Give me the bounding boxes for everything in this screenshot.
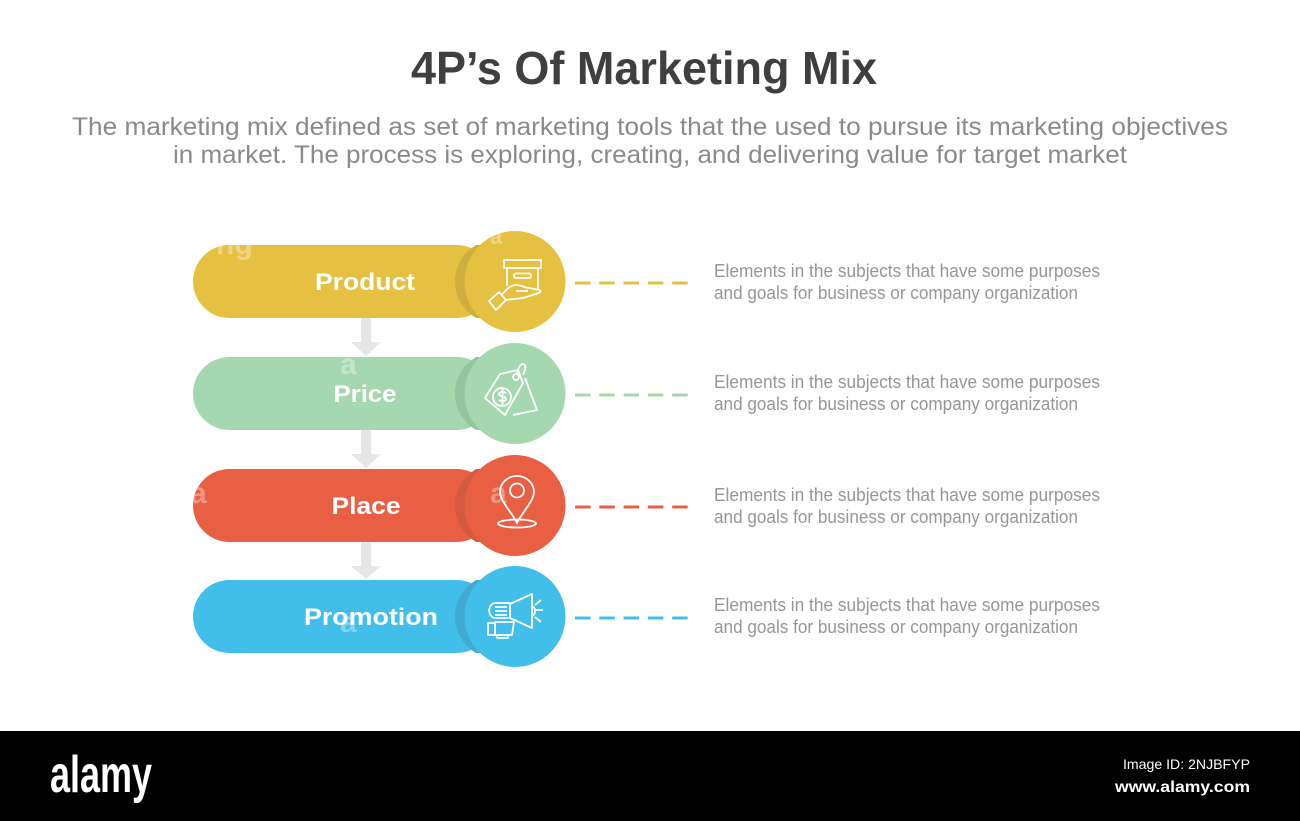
- title: 4P’s Of Marketing Mix: [411, 42, 877, 94]
- product bar shade: [455, 245, 480, 318]
- place bar shade: [455, 469, 480, 542]
- place circle: [464, 455, 566, 556]
- watermark fragments: ng: [216, 228, 253, 261]
- arrow: price to place: [351, 430, 381, 468]
- arrow: place to promotion: [351, 542, 381, 579]
- text block: place: [714, 485, 1100, 527]
- icon: price tags: [485, 364, 537, 415]
- price label: Price: [334, 381, 396, 408]
- place label: Place: [332, 493, 400, 520]
- text block: promotion: [714, 595, 1100, 637]
- product circle: [464, 231, 566, 332]
- connector: place: [575, 506, 688, 508]
- watermark fragments: a: [490, 477, 507, 510]
- watermark fragments: [190, 224, 507, 639]
- product label: Product: [315, 269, 415, 296]
- website: www.alamy.com: [1114, 779, 1250, 796]
- image id: Image ID: 2NJBFYP: [1123, 756, 1250, 772]
- text block: product: Elements in the subjects that have some purposes: [714, 261, 1100, 281]
- promotion circle: [464, 566, 566, 667]
- promotion label: Promotion: [304, 604, 438, 631]
- price bar shade: [455, 357, 480, 430]
- connector: price: [575, 394, 688, 396]
- arrow: product to price: [351, 318, 381, 356]
- subtitle: [72, 113, 1228, 169]
- watermark fragments: a: [490, 224, 503, 249]
- text block: product: and goals for business or company organization: [714, 283, 1078, 303]
- text block: price: and goals for business or company organization: [714, 394, 1078, 414]
- footer logo: alamy: [50, 746, 152, 804]
- price bar: [193, 357, 493, 430]
- panel: price: [193, 343, 566, 444]
- text block: price: Elements in the subjects that have some purposes: [714, 372, 1100, 392]
- place bar: [193, 469, 493, 542]
- connector: product: [575, 282, 688, 284]
- panel: product: [193, 231, 566, 332]
- subtitle: The marketing mix defined as set of marketing tools that the used to pursue its marketing objectives: [72, 113, 1228, 141]
- watermark fragments: a: [190, 477, 207, 510]
- text block: price: [714, 372, 1100, 414]
- text block: promotion: and goals for business or company organization: [714, 617, 1078, 637]
- icon: map pin: [498, 476, 536, 528]
- text block: place: and goals for business or company organization: [714, 507, 1078, 527]
- text block: product: [714, 261, 1100, 303]
- product bar: [193, 245, 493, 318]
- panel: promotion: [193, 566, 566, 667]
- subtitle: in market. The process is exploring, creating, and delivering value for target market: [173, 141, 1127, 169]
- watermark fragments: a: [340, 348, 357, 381]
- panel: place: [193, 455, 566, 556]
- price circle: [464, 343, 566, 444]
- watermark fragments: a: [340, 606, 357, 639]
- icon: megaphone: [488, 594, 543, 638]
- connector: promotion: [575, 616, 688, 620]
- footer band: [0, 731, 1300, 821]
- text block: place: Elements in the subjects that have some purposes: [714, 485, 1100, 505]
- icon: box in hand: [489, 260, 541, 310]
- promotion bar shade: [455, 580, 480, 653]
- promotion bar: [193, 580, 493, 653]
- text block: promotion: Elements in the subjects that have some purposes: [714, 595, 1100, 615]
